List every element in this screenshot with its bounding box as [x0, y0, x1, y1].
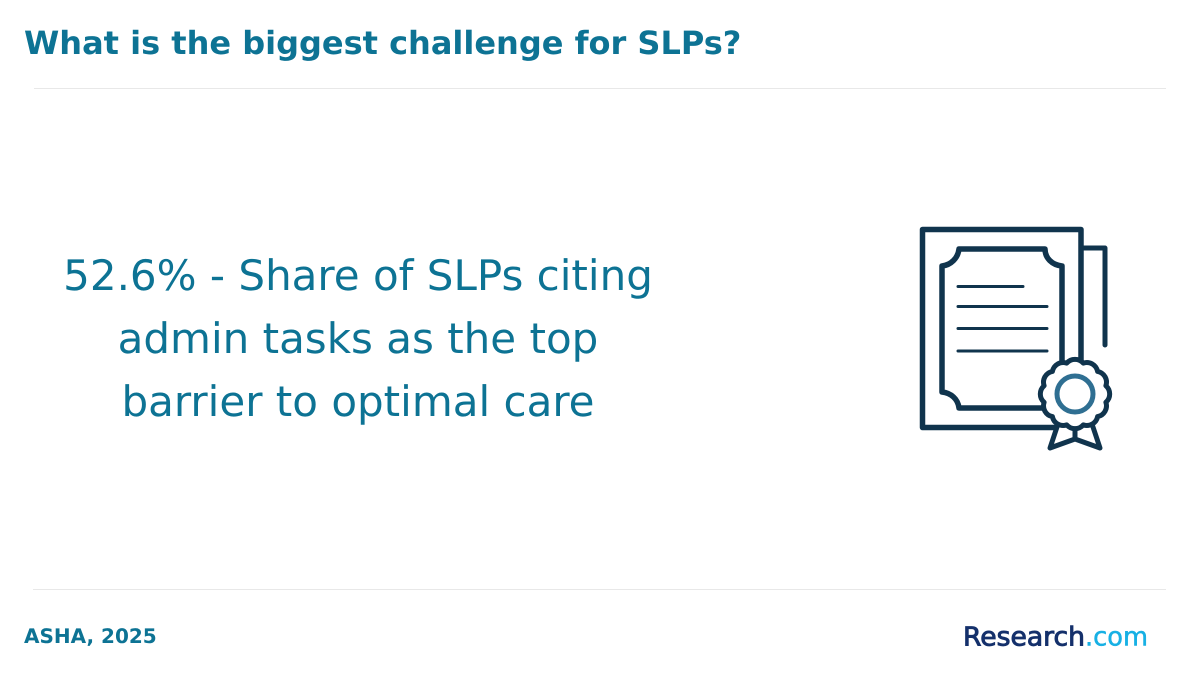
key statistic text: admin tasks as the top [118, 314, 598, 363]
icon: certificate with rosette [920, 226, 1112, 450]
key statistic text: 52.6% - Share of SLPs citing [63, 251, 653, 300]
key statistic text: barrier to optimal care [121, 377, 594, 426]
logo: Research.com: Research [963, 622, 1085, 652]
logo: Research.com [963, 622, 1148, 652]
key statistic text [63, 251, 653, 426]
source: ASHA, 2025 [24, 624, 157, 648]
logo: Research.com: .com [1085, 622, 1148, 652]
title: What is the biggest challenge for SLPs? [24, 24, 741, 62]
